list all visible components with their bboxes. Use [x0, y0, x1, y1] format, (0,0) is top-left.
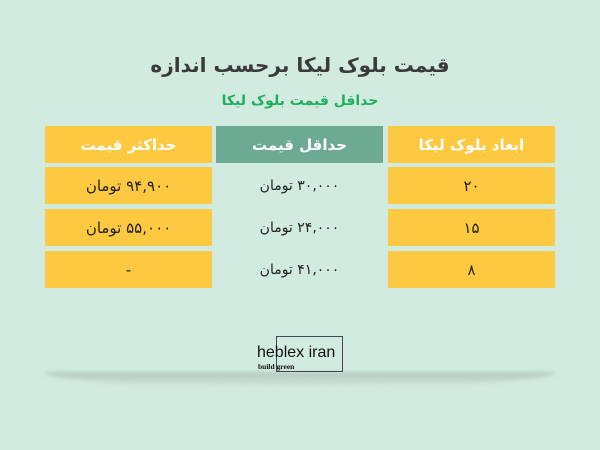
title: قیمت بلوک لیکا برحسب اندازه [150, 53, 450, 77]
row 3: - [126, 260, 131, 278]
logo [257, 336, 343, 372]
header: max price [45, 126, 212, 163]
row 3 [45, 251, 212, 288]
logo: heblex iran [257, 344, 335, 361]
header: size: ابعاد بلوک لیکا [419, 136, 524, 154]
header: max price: حداکثر قیمت [81, 136, 176, 154]
table: ۲۰ [463, 176, 480, 194]
row 2: ۵۵,۰۰۰ تومان [86, 218, 171, 236]
subtitle: حداقل قیمت بلوک لیکا [222, 93, 378, 109]
row 1 [45, 167, 212, 204]
table: ۴۱,۰۰۰ تومان [260, 262, 339, 278]
table: ۳۰,۰۰۰ تومان [260, 178, 339, 194]
table [45, 126, 555, 288]
table: ۱۵ [463, 218, 480, 236]
header: min price [216, 126, 383, 163]
table: ۲۴,۰۰۰ تومان [260, 220, 339, 236]
row 1: ۹۴,۹۰۰ تومان [86, 176, 171, 194]
table: ۸ [467, 260, 476, 278]
header: min price: حداقل قیمت [252, 136, 347, 154]
row 2 [45, 209, 212, 246]
logo: build green [258, 362, 294, 371]
shadow band [45, 372, 555, 388]
header: size [388, 126, 555, 163]
